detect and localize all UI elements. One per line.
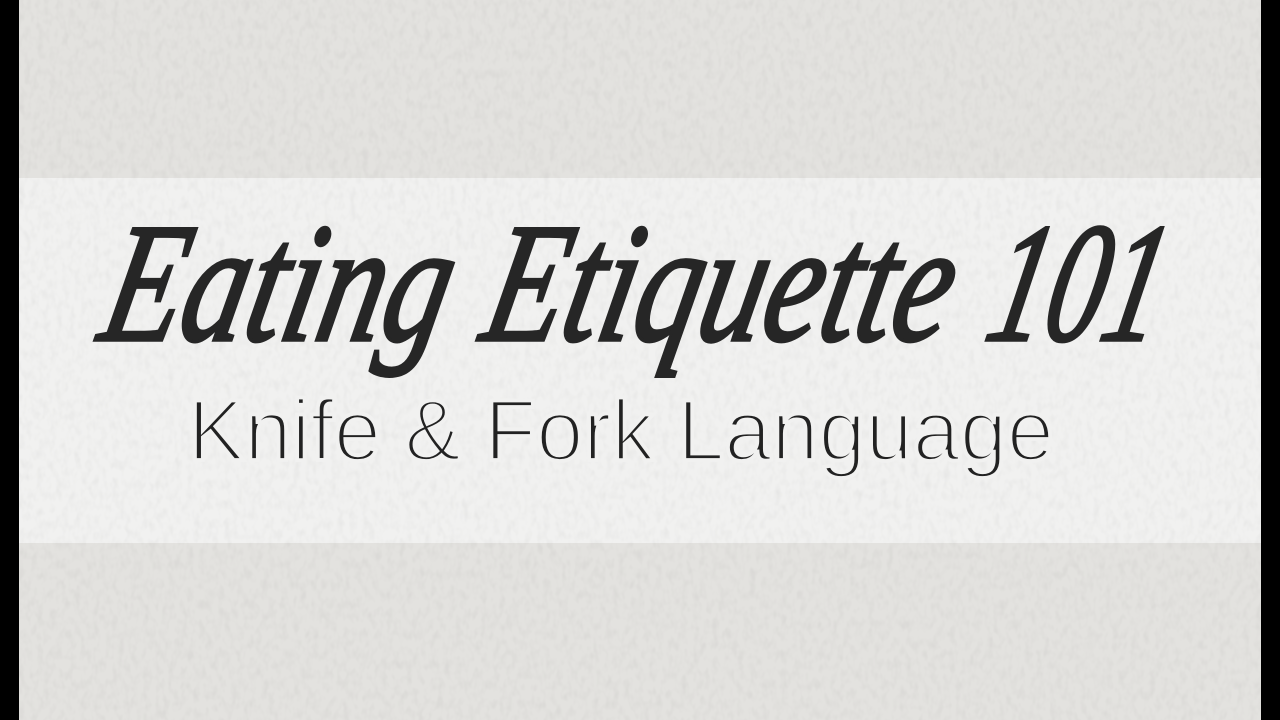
title: [86, 190, 1186, 378]
subtitle: Knife & Fork Language: [188, 383, 1054, 479]
left black bar: [0, 0, 19, 720]
title: 101: [974, 190, 1186, 378]
title: Eating: [86, 190, 473, 378]
panel: light title band: [19, 178, 1261, 543]
title: Etiquette: [468, 190, 975, 378]
right black bar: [1261, 0, 1280, 720]
